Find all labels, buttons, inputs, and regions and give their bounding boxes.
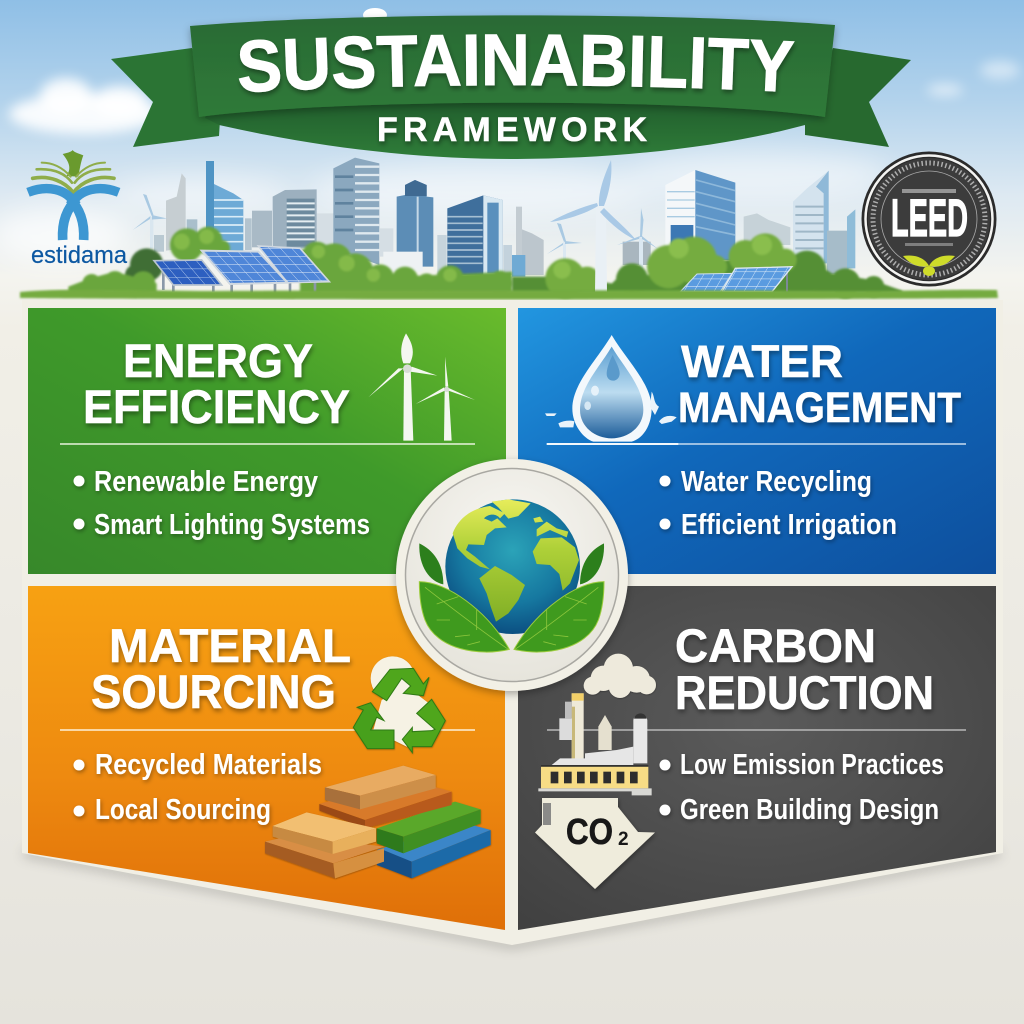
estidama logo xyxy=(28,150,128,269)
logo wordmark: estidama xyxy=(31,242,128,269)
heading xyxy=(91,619,351,718)
clouds xyxy=(0,8,1020,263)
leaves xyxy=(419,543,604,652)
heading xyxy=(675,619,934,719)
heading xyxy=(678,336,961,432)
skyline right half xyxy=(512,170,855,277)
CO2 label: CO xyxy=(566,811,613,852)
panel: water management xyxy=(518,308,996,574)
title banner xyxy=(111,14,911,159)
icon: smoke cloud xyxy=(584,654,656,698)
bullet list xyxy=(660,466,897,541)
trees left xyxy=(68,227,513,296)
icon: CO2 down arrow: 2 xyxy=(618,829,629,850)
badge leaf emblem xyxy=(903,255,955,276)
bullet list: Smart Lighting Systems xyxy=(94,509,370,541)
bullet list: Low Emission Practices xyxy=(680,749,944,781)
grass strip xyxy=(20,290,998,300)
center globe emblem xyxy=(396,459,628,691)
heading: ENERGY xyxy=(123,334,313,387)
heading: WATER xyxy=(681,336,843,387)
LEED badge xyxy=(862,152,996,286)
icon: CO2 down arrow xyxy=(535,798,655,889)
heading: MANAGEMENT xyxy=(678,384,961,432)
bullet list xyxy=(74,466,370,541)
subtitle: FRAMEWORK xyxy=(377,111,647,149)
wind turbines in skyline xyxy=(133,194,658,274)
icon: factory xyxy=(538,693,652,795)
heading: SOURCING xyxy=(91,665,336,718)
panel: energy efficiency xyxy=(28,308,506,574)
upper banner xyxy=(190,15,835,117)
trees right xyxy=(512,233,902,298)
bullet list: Local Sourcing xyxy=(95,794,271,826)
globe xyxy=(445,499,580,634)
bullet list: Green Building Design xyxy=(680,794,939,826)
heading: CARBON xyxy=(675,619,876,672)
solar panels right xyxy=(680,267,792,297)
bullet list xyxy=(74,749,322,826)
cream card behind panels xyxy=(22,300,1003,945)
heading: EFFICIENCY xyxy=(83,380,350,433)
bullet list xyxy=(660,749,944,826)
bullet list: Water Recycling xyxy=(681,466,872,498)
right ribbon tail xyxy=(805,48,911,147)
panel: material sourcing xyxy=(28,586,505,930)
icon: wind turbines xyxy=(368,333,475,441)
skyline left half xyxy=(154,158,512,275)
large wind turbine xyxy=(550,160,636,292)
lower banner xyxy=(205,95,825,159)
bullet list: Recycled Materials xyxy=(95,749,322,781)
solar panels left xyxy=(154,246,329,293)
heading: MATERIAL xyxy=(109,619,351,672)
heading xyxy=(83,334,350,433)
panel: carbon reduction xyxy=(518,586,996,930)
bottom card shadow xyxy=(24,853,1000,945)
icon: stacked planks xyxy=(265,766,491,878)
bullet list: Efficient Irrigation xyxy=(681,509,897,541)
icon: water drop xyxy=(545,335,678,444)
bullet list: Renewable Energy xyxy=(94,466,318,498)
heading: REDUCTION xyxy=(675,666,934,719)
icon: recycling arrows xyxy=(353,656,445,753)
left ribbon tail xyxy=(111,48,220,147)
main title: SUSTAINABILITY xyxy=(238,34,796,97)
